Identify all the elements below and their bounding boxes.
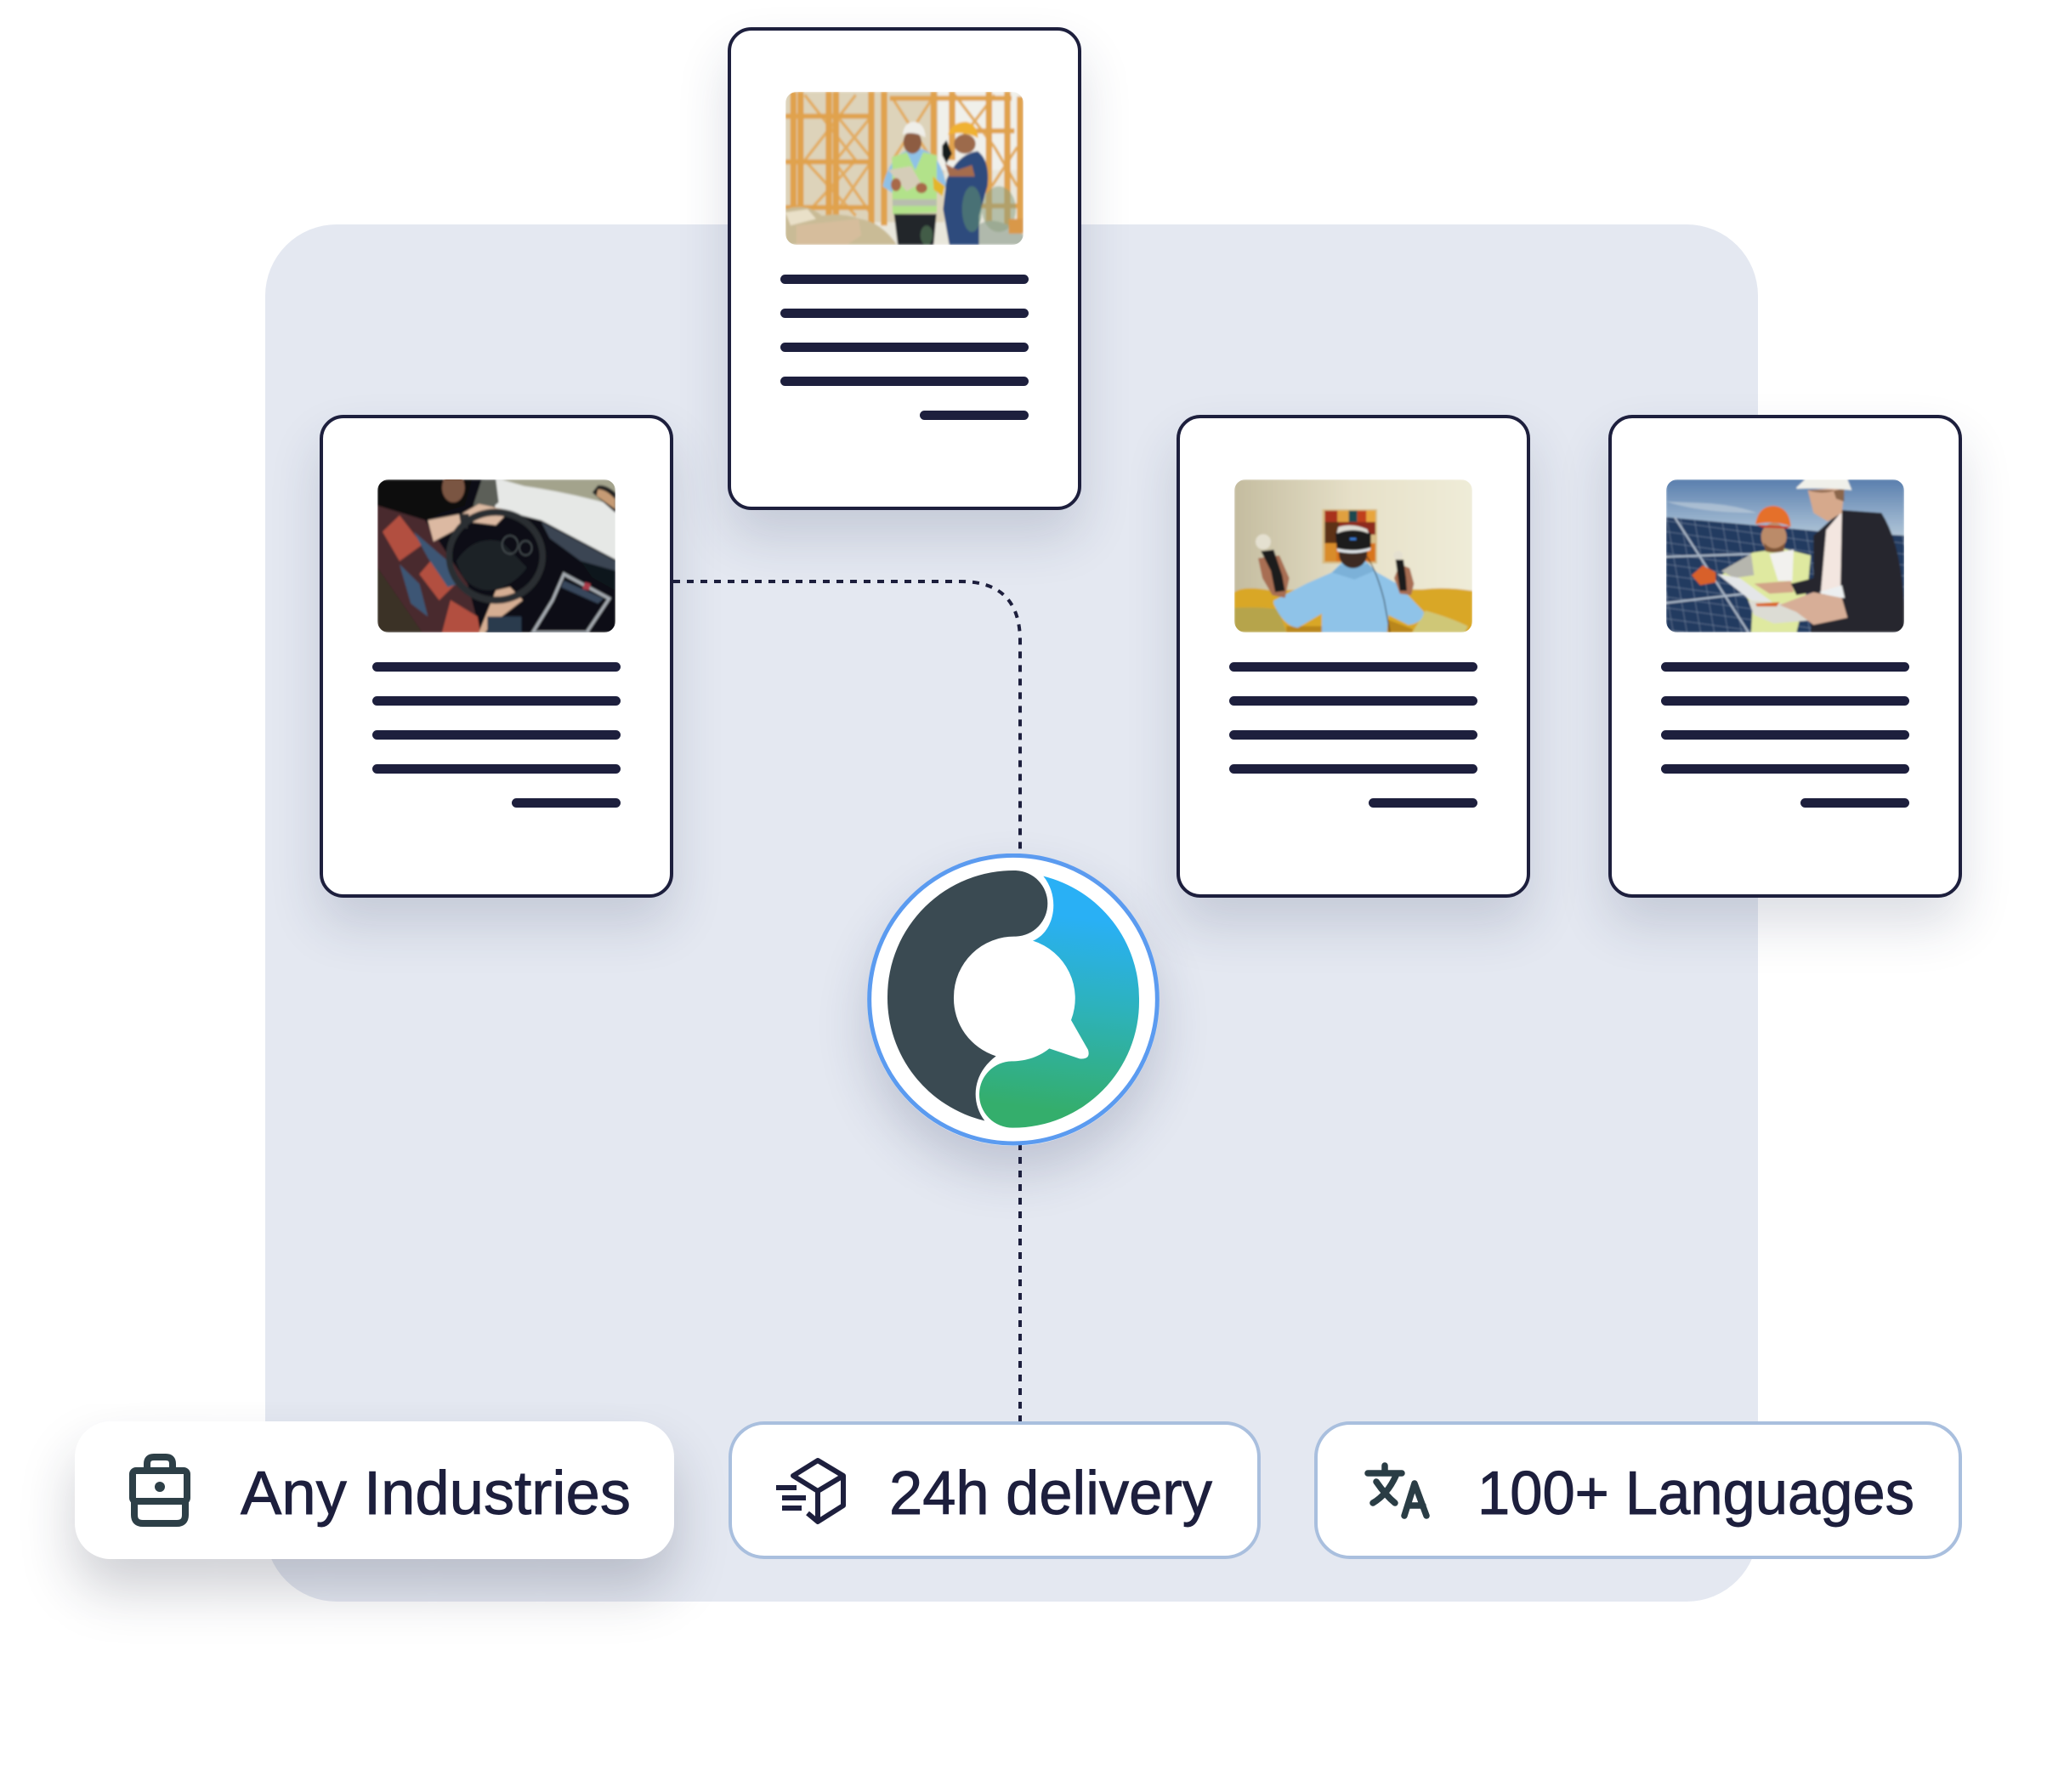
card: driver: [320, 415, 673, 898]
label: 100+ Languages: [1477, 1460, 1914, 1528]
pill: Any Industries: [75, 1421, 674, 1559]
text placeholder lines: [1661, 662, 1909, 672]
central logo badge: [867, 853, 1160, 1146]
label: Any Industries: [241, 1460, 631, 1528]
photo: man with VR headset on sofa: [1234, 479, 1472, 632]
text placeholder lines: [780, 275, 1029, 284]
text placeholder lines: [372, 662, 621, 672]
icon: translate: [1364, 1462, 1430, 1519]
card: virtual reality: [1177, 415, 1530, 898]
icon: briefcase: [129, 1454, 190, 1527]
text placeholder lines: [1229, 662, 1477, 672]
photo: construction site: [785, 92, 1024, 245]
card: solar engineers: [1608, 415, 1962, 898]
photo: person driving a car: [377, 479, 615, 632]
photo: engineers at solar panels: [1666, 479, 1904, 632]
pill: 100+ Languages: [1314, 1421, 1962, 1559]
card: construction workers: [728, 27, 1081, 510]
panel: background: [265, 224, 1758, 1602]
logo: dark segment: [887, 870, 1047, 1120]
pill: 24h delivery: [729, 1421, 1261, 1559]
logo: gradient segment: [979, 876, 1139, 1128]
icon: fast delivery box: [776, 1458, 846, 1525]
label: 24h delivery: [889, 1460, 1212, 1528]
